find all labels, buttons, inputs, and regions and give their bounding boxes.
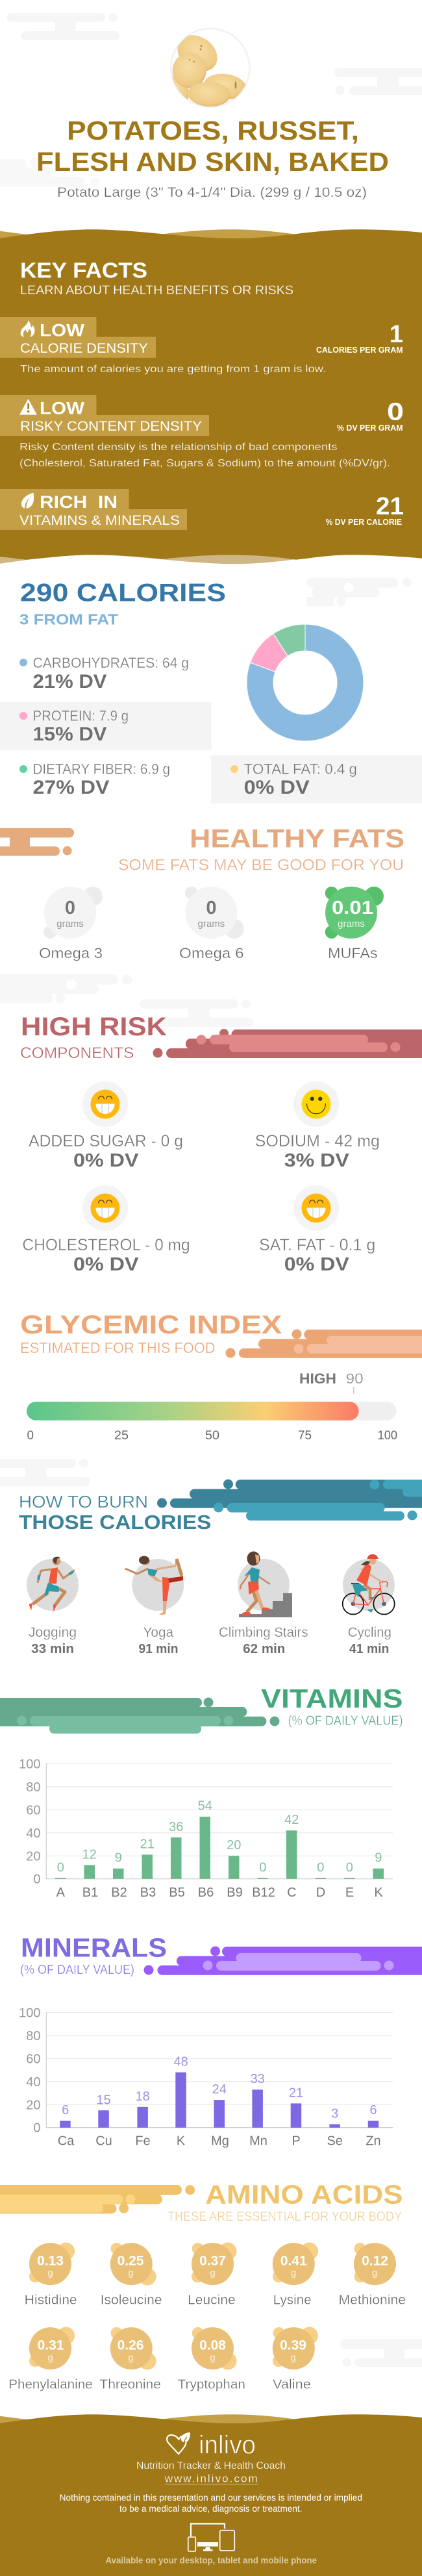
bar chart: minerals: 18 xyxy=(136,2090,150,2104)
bar chart: vitamins: 0 xyxy=(346,1861,353,1875)
amino acid: tryptophan: Tryptophan xyxy=(178,2378,245,2392)
decorative shape: vitamins xyxy=(0,1698,279,1734)
legend: carbohydrates: CARBOHYDRATES: 64 g xyxy=(32,655,189,671)
amino acid: threonine xyxy=(99,2327,161,2392)
activity: climbing stairs: 62 min xyxy=(243,1642,285,1656)
activity: cycling: Cycling xyxy=(348,1625,391,1640)
legend: dietary fiber: DIETARY FIBER: 6.9 g xyxy=(32,761,170,777)
icon: inlivo heart logo xyxy=(167,2432,190,2454)
burn heading: THOSE CALORIES xyxy=(19,1511,211,1534)
mufas: MUFAs xyxy=(328,945,378,961)
risk item: saturated fat xyxy=(259,1185,375,1275)
glycemic index bar xyxy=(27,1402,397,1421)
decorative cloud: top left xyxy=(6,13,119,40)
icon: leaf xyxy=(21,493,34,509)
serving size subtitle: Potato Large (3" To 4-1/4" Dia. (299 g / 10.5 oz) xyxy=(57,184,367,200)
disclaimer xyxy=(60,2492,362,2514)
icon: stair climber xyxy=(239,1551,292,1617)
bar chart: minerals: 24 xyxy=(212,2082,227,2097)
bar chart: vitamins: B5 xyxy=(169,1886,185,1900)
bar chart: minerals: Mg xyxy=(211,2134,229,2149)
minerals subheading: (% OF DAILY VALUE) xyxy=(20,1963,134,1977)
glycemic index heading: GLYCEMIC INDEX xyxy=(20,1311,282,1339)
bar chart: vitamins xyxy=(19,1757,393,1900)
risky content density badge: RISKY CONTENT DENSITY xyxy=(20,418,202,434)
decorative shape: burn calories xyxy=(157,1480,422,1521)
calorie density value: CALORIES PER GRAM xyxy=(316,346,403,355)
from fat subheading: 3 FROM FAT xyxy=(19,611,119,628)
calorie density value: 1 xyxy=(390,321,403,348)
bar chart: minerals: 40 xyxy=(26,2075,40,2090)
legend: carbohydrates xyxy=(19,655,189,692)
omega 3: 0 xyxy=(65,898,75,918)
bar chart: vitamins: E xyxy=(345,1886,354,1900)
key facts subheading: LEARN ABOUT HEALTH BENEFITS OR RISKS xyxy=(20,283,293,297)
tagline: Nutrition Tracker & Health Coach xyxy=(136,2460,286,2471)
bar chart: vitamins: 0 xyxy=(33,1873,40,1887)
risky content value xyxy=(337,398,404,433)
bar chart: minerals: 48 xyxy=(173,2055,188,2069)
bar chart: vitamins: B12 xyxy=(252,1886,275,1900)
legend: total fat xyxy=(211,755,422,803)
bar chart: vitamins: C xyxy=(287,1886,297,1900)
decorative cloud: top right xyxy=(334,68,422,95)
icon: yoga pose xyxy=(125,1556,183,1615)
amino acid: tryptophan: g xyxy=(210,2353,216,2363)
icon: flame xyxy=(21,320,35,337)
vitamins and minerals badge xyxy=(0,489,187,530)
amino acid: isoleucine xyxy=(101,2243,162,2308)
risk item: added sugar: 0% DV xyxy=(73,1150,139,1171)
decorative shape: minerals xyxy=(144,1946,422,1975)
bar chart: vitamins: 40 xyxy=(26,1826,40,1841)
vitamins value: % DV PER CALORIE xyxy=(326,518,402,527)
bar chart: vitamins: A xyxy=(56,1886,66,1900)
bar chart: vitamins: B2 xyxy=(111,1886,127,1900)
bar chart: minerals xyxy=(19,2006,393,2149)
amino acids subheading: THESE ARE ESSENTIAL FOR YOUR BODY xyxy=(168,2210,402,2224)
omega 3: Omega 3 xyxy=(39,945,103,961)
risk item: added sugar: ADDED SUGAR - 0 g xyxy=(29,1132,183,1150)
risk item: cholesterol xyxy=(22,1185,190,1275)
amino acid: threonine: Threonine xyxy=(99,2378,161,2392)
amino acid: methionine: Methionine xyxy=(339,2293,406,2308)
amino acid: methionine: g xyxy=(372,2267,377,2279)
icon: grinning emoji xyxy=(301,1194,331,1222)
bar chart: minerals: Fe xyxy=(135,2134,151,2149)
bar chart: minerals: Cu xyxy=(95,2134,112,2149)
risky content description: (Cholesterol, Saturated Fat, Sugars & Sodium) to the amount (%DV/gr). xyxy=(19,458,390,469)
legend: protein xyxy=(0,702,212,750)
activity: cycling: 41 min xyxy=(349,1642,389,1656)
amino acid: lysine xyxy=(273,2242,318,2308)
bar chart: vitamins: 80 xyxy=(26,1780,40,1795)
amino acid: threonine: g xyxy=(128,2353,134,2363)
panel: footer xyxy=(0,2414,422,2576)
amino acid: phenylalanine: 0.31 xyxy=(38,2338,64,2353)
vitamins value: 21 xyxy=(376,493,404,520)
calorie density badge xyxy=(0,317,156,358)
mufas xyxy=(325,887,384,961)
bar chart: minerals: 3 xyxy=(331,2106,338,2121)
amino acid: histidine: Histidine xyxy=(25,2293,77,2308)
title: FLESH AND SKIN, BAKED xyxy=(36,147,389,177)
amino acid: valine xyxy=(273,2327,318,2392)
glycemic index value xyxy=(299,1370,364,1394)
activity: jogging: Jogging xyxy=(29,1625,77,1640)
key facts heading: KEY FACTS xyxy=(20,259,147,282)
activity: jogging xyxy=(27,1557,79,1656)
inlivo wordmark: inlivo xyxy=(199,2431,256,2459)
risk item: saturated fat: SAT. FAT - 0.1 g xyxy=(259,1236,375,1254)
risk item: sodium: SODIUM - 42 mg xyxy=(255,1132,380,1150)
glycemic index value: 90 xyxy=(346,1370,364,1387)
bar chart: minerals: 6 xyxy=(62,2103,69,2117)
bar chart: vitamins: 100 xyxy=(19,1757,40,1771)
vitamins subheading: (% OF DAILY VALUE) xyxy=(288,1714,403,1728)
amino acid: phenylalanine: g xyxy=(47,2353,53,2363)
disclaimer: to be a medical advice, diagnosis or treatment. xyxy=(119,2503,303,2514)
decorative cloud: behind title xyxy=(0,157,100,187)
risky content description: Risky Content density is the relationship of bad components xyxy=(19,442,338,453)
glycemic index scale: 50 xyxy=(205,1429,219,1443)
amino acid: tryptophan: 0.08 xyxy=(199,2338,226,2353)
omega 6: Omega 6 xyxy=(179,945,244,961)
omega 6: grams xyxy=(198,918,225,929)
glycemic index subheading: ESTIMATED FOR THIS FOOD xyxy=(20,1339,216,1356)
decorative shape: healthy fats xyxy=(0,828,74,856)
bar chart: minerals: 100 xyxy=(19,2006,40,2020)
calorie density badge: LOW xyxy=(40,321,85,340)
vitamins heading: VITAMINS xyxy=(261,1684,403,1713)
calorie density description: The amount of calories you are getting from 1 gram is low. xyxy=(20,364,326,375)
risky content value: 0 xyxy=(387,398,404,425)
bar chart: minerals: K xyxy=(177,2134,186,2149)
activity: cycling xyxy=(343,1554,395,1656)
amino acid: leucine xyxy=(188,2242,236,2308)
activity: climbing stairs xyxy=(219,1551,308,1656)
legend: protein: PROTEIN: 7.9 g xyxy=(32,707,129,724)
risk item: saturated fat: 0% DV xyxy=(284,1254,350,1275)
icon: cyclist xyxy=(343,1554,395,1615)
risky content density badge xyxy=(0,395,209,436)
bar chart: vitamins: 21 xyxy=(140,1837,155,1851)
omega 6 xyxy=(179,887,244,961)
legend: protein: 15% DV xyxy=(32,724,106,745)
risk item: cholesterol: CHOLESTEROL - 0 mg xyxy=(22,1236,190,1254)
amino acid: leucine: Leucine xyxy=(188,2293,236,2308)
amino acid: methionine: 0.12 xyxy=(362,2254,388,2268)
bar chart: vitamins: 36 xyxy=(169,1820,183,1834)
amino acid: valine: 0.39 xyxy=(280,2338,306,2353)
bar chart: minerals: Mn xyxy=(249,2134,267,2149)
amino acid: histidine: g xyxy=(47,2267,53,2279)
bar chart: vitamins: 20 xyxy=(227,1838,241,1852)
bar chart: vitamins: B1 xyxy=(82,1886,98,1900)
activity: climbing stairs: Climbing Stairs xyxy=(219,1625,308,1640)
glycemic index scale: 100 xyxy=(378,1429,397,1443)
mufas: grams xyxy=(338,918,365,929)
vitamins and minerals badge: VITAMINS & MINERALS xyxy=(19,512,180,528)
decorative cloud: calories xyxy=(307,578,412,606)
icon: grinning emoji xyxy=(91,1194,119,1222)
burn heading: HOW TO BURN xyxy=(19,1492,148,1511)
legend: dietary fiber xyxy=(19,761,170,798)
bar chart: minerals: 0 xyxy=(33,2121,40,2136)
amino acid: tryptophan xyxy=(178,2327,245,2392)
activity: yoga xyxy=(125,1556,184,1656)
bar chart: vitamins: B3 xyxy=(140,1886,156,1900)
website link: www.inlivo.com xyxy=(164,2472,258,2485)
bar chart: minerals: 15 xyxy=(96,2093,111,2107)
glycemic index scale: 25 xyxy=(114,1429,129,1443)
amino acid: lysine: Lysine xyxy=(273,2293,312,2308)
bar chart: vitamins: 54 xyxy=(198,1799,212,1813)
glycemic index value: HIGH xyxy=(299,1370,336,1387)
amino acid: lysine: g xyxy=(291,2267,296,2279)
bar chart: vitamins: 42 xyxy=(284,1813,299,1827)
amino acid: valine: Valine xyxy=(273,2378,311,2392)
decorative shape: amino acids xyxy=(0,2185,195,2214)
bar chart: vitamins: 9 xyxy=(115,1851,122,1865)
high risk heading: HIGH RISK xyxy=(21,1013,167,1041)
activity: yoga: 91 min xyxy=(139,1642,178,1656)
risk item: sodium: 3% DV xyxy=(284,1150,350,1171)
minerals heading: MINERALS xyxy=(21,1933,167,1963)
healthy fats subheading: SOME FATS MAY BE GOOD FOR YOU xyxy=(118,857,404,874)
icon: warning triangle xyxy=(19,399,37,415)
bar chart: vitamins: 12 xyxy=(82,1847,97,1862)
bar chart: vitamins: 0 xyxy=(259,1861,266,1875)
burn heading xyxy=(19,1492,211,1534)
bar chart: vitamins: 60 xyxy=(26,1803,40,1817)
risky content density badge: LOW xyxy=(40,399,85,418)
icon: smiling emoji xyxy=(301,1090,331,1118)
amino acid: valine: g xyxy=(290,2353,296,2363)
amino acid: leucine: 0.37 xyxy=(199,2254,226,2268)
amino acid: isoleucine: 0.25 xyxy=(118,2254,144,2268)
icon: grinning emoji xyxy=(91,1090,119,1118)
amino acids heading: AMINO ACIDS xyxy=(205,2179,403,2209)
panel: key facts xyxy=(0,229,422,564)
bar chart: vitamins: 9 xyxy=(375,1851,382,1865)
amino acid: threonine: 0.26 xyxy=(118,2338,143,2353)
calories heading: 290 CALORIES xyxy=(20,579,226,607)
risky content value: % DV PER GRAM xyxy=(337,423,403,433)
glycemic index scale: 75 xyxy=(298,1429,312,1443)
icon: potatoes in circle xyxy=(165,28,249,108)
disclaimer: Nothing contained in this presentation and our services is intended or implied xyxy=(60,2492,362,2503)
glycemic index scale xyxy=(27,1429,397,1443)
bar chart: minerals: Se xyxy=(327,2134,343,2149)
bar chart: minerals: P xyxy=(292,2134,301,2149)
risky content description xyxy=(19,442,390,469)
bar chart: vitamins: 0 xyxy=(57,1861,64,1875)
high risk subheading: COMPONENTS xyxy=(20,1044,134,1062)
amino acid: phenylalanine: Phenylalanine xyxy=(8,2378,93,2392)
omega 3: grams xyxy=(56,918,84,929)
legend: carbohydrates: 21% DV xyxy=(32,671,106,692)
bar chart: minerals: 33 xyxy=(251,2072,265,2086)
amino acid: lysine: 0.41 xyxy=(280,2254,307,2268)
bar chart: vitamins: 20 xyxy=(26,1849,40,1863)
amino acid: histidine xyxy=(25,2242,77,2308)
icon: jogger xyxy=(29,1557,75,1612)
calorie density badge: CALORIE DENSITY xyxy=(20,340,148,356)
bar chart: minerals: Ca xyxy=(58,2134,75,2149)
decorative cloud: amino acids xyxy=(340,2340,422,2367)
amino acid: leucine: g xyxy=(210,2267,216,2279)
bar chart: minerals: 21 xyxy=(289,2086,303,2100)
mufas: 0.01 xyxy=(332,898,373,918)
decorative shape: glycemic index xyxy=(226,1329,422,1358)
bar chart: vitamins: B9 xyxy=(227,1886,243,1900)
title xyxy=(36,116,389,177)
activity: yoga: Yoga xyxy=(143,1625,173,1640)
bar chart: vitamins: B6 xyxy=(198,1886,214,1900)
legend: total fat: 0% DV xyxy=(244,777,310,798)
decorative cloud: left xyxy=(0,974,132,1004)
activity: jogging: 33 min xyxy=(31,1642,74,1656)
healthy fats heading: HEALTHY FATS xyxy=(190,825,404,853)
legend: total fat: TOTAL FAT: 0.4 g xyxy=(244,761,357,777)
bar chart: minerals: 20 xyxy=(26,2098,40,2112)
amino acid: phenylalanine xyxy=(8,2327,93,2392)
bar chart: minerals: 6 xyxy=(369,2103,377,2117)
title: POTATOES, RUSSET, xyxy=(67,116,359,145)
amino acid: histidine: 0.13 xyxy=(37,2254,64,2268)
amino acid: methionine xyxy=(339,2243,406,2308)
vitamins value xyxy=(326,493,404,527)
calorie density value xyxy=(316,321,403,355)
bar chart: vitamins: K xyxy=(374,1886,383,1900)
bar chart: minerals: 60 xyxy=(26,2052,40,2066)
vitamins and minerals badge: RICH IN xyxy=(40,492,118,512)
legend: dietary fiber: 27% DV xyxy=(32,777,109,798)
availability note: Available on your desktop, tablet and mobile phone xyxy=(105,2555,317,2566)
bar chart: minerals: Zn xyxy=(366,2134,381,2149)
decorative shape: high risk xyxy=(153,1029,422,1058)
decorative cloud: burn xyxy=(0,1459,90,1486)
bar chart: vitamins: D xyxy=(316,1886,325,1900)
risk item: added sugar xyxy=(29,1081,183,1171)
amino acid: isoleucine: Isoleucine xyxy=(101,2293,162,2308)
decorative cloud: center xyxy=(140,999,253,1027)
omega 3 xyxy=(39,887,103,961)
amino acid: isoleucine: g xyxy=(128,2267,134,2279)
donut chart: macronutrients xyxy=(247,624,364,741)
glycemic index scale: 0 xyxy=(27,1429,34,1443)
risk item: sodium xyxy=(255,1081,380,1171)
bar chart: minerals: 80 xyxy=(26,2029,40,2043)
icon: devices xyxy=(188,2524,234,2551)
risk item: cholesterol: 0% DV xyxy=(73,1254,139,1275)
omega 6: 0 xyxy=(206,898,216,918)
bar chart: vitamins: 0 xyxy=(317,1861,324,1875)
